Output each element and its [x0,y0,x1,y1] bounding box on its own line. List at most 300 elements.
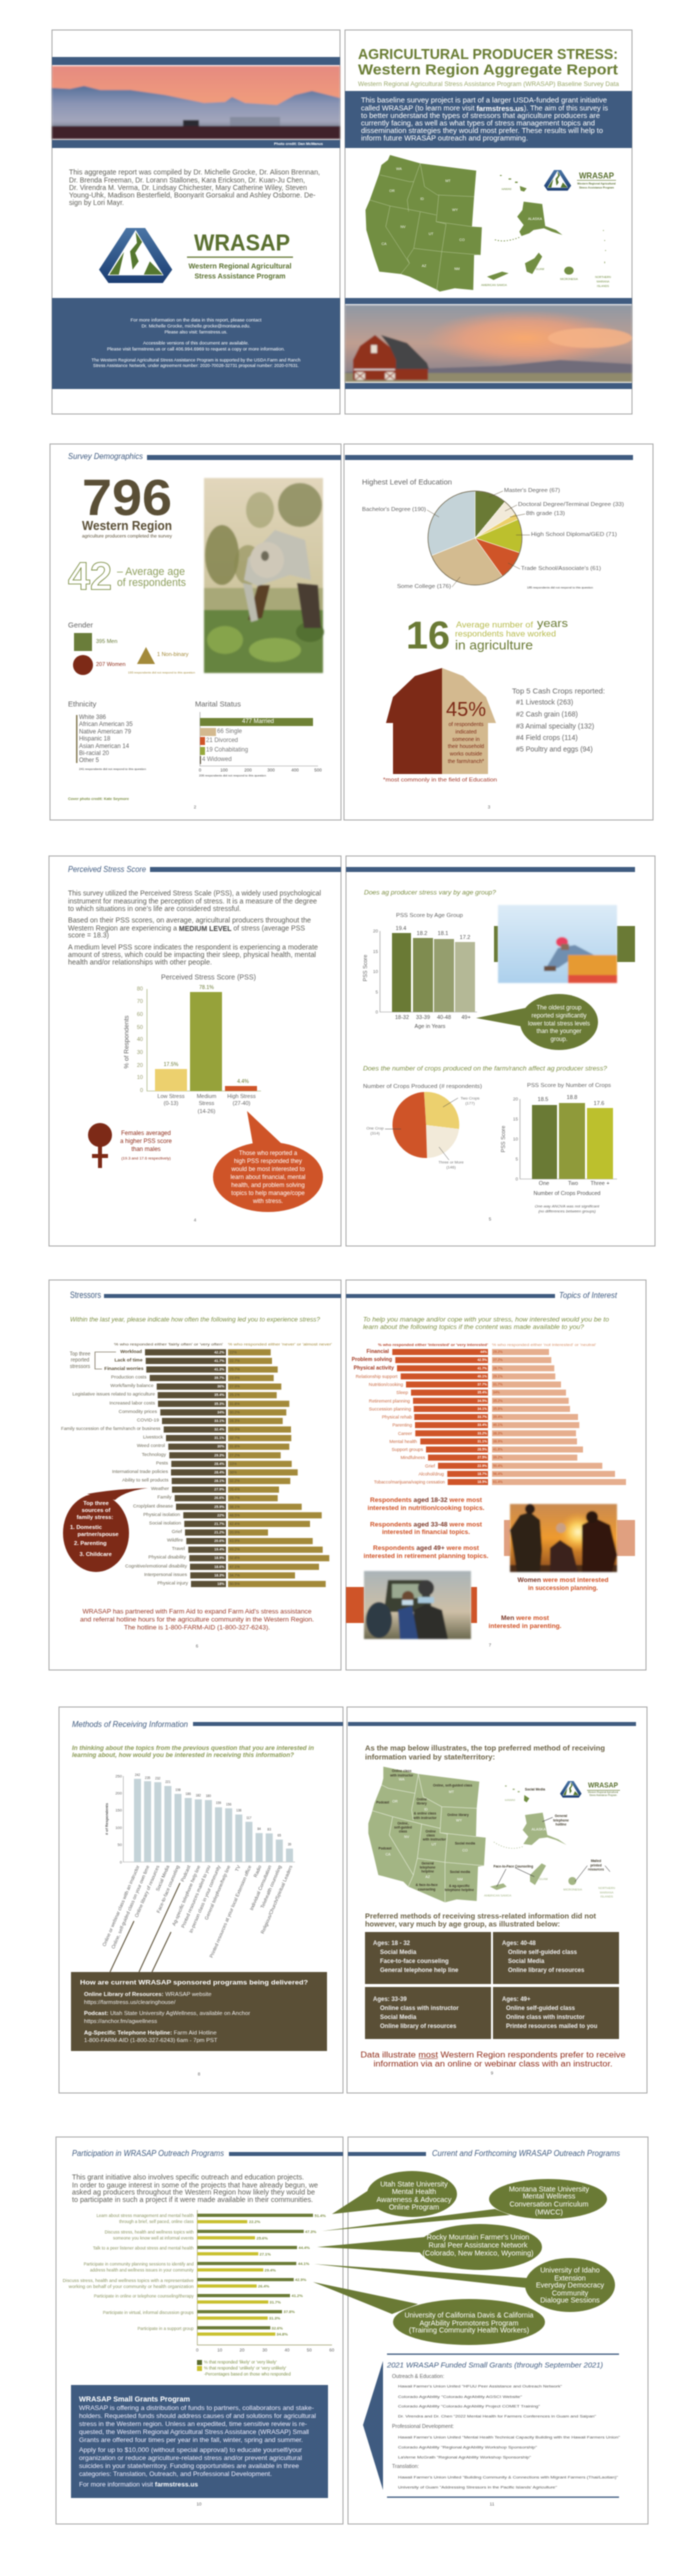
callout: Montana State University: (MWCC) [535,2208,563,2216]
diverging bar chart: stressors: 21.7% [214,1522,225,1526]
icon: female symbol with callout text [88,1123,173,1168]
panel: small grants program: categories: Translation, Outreach, and Professional Development. [79,2472,272,2478]
diverging bar chart: stressors: 43.9% [230,1539,240,1543]
map: preferred method by state: Face-to-Face Counseling [494,1864,533,1868]
bar chart: likelihood of participation: Talk to a peer listener about stress and mental health [93,2246,194,2250]
top three stressors bracket: reported [71,1358,90,1364]
map: preferred method by state: telephone [553,1818,569,1822]
diverging bar chart: stressors: Travel [172,1546,185,1552]
panel: ages 49+: Online self-guided class [506,2006,576,2012]
barn graphic: 45 percent: their household [448,744,484,750]
diverging bar chart: stressors: Wildfire [167,1538,183,1544]
diverging bar chart: stressors: 25.7% [230,1496,240,1500]
barn graphic: 45 percent [383,668,497,784]
contact footer: Accessible versions of this document are available. [143,340,249,346]
bar chart: likelihood of participation: 44.4% [298,2245,310,2250]
map: preferred method by state: Online [416,1797,427,1801]
diverging bar chart: topics: 38.9% [493,1439,503,1443]
bar chart: PSS by number of crops: Two [568,1181,578,1187]
callout: Montana State University [322,2179,607,2231]
diverging bar chart: stressors: 36% [230,1470,237,1474]
bar chart: PSS by age: 18.1 [438,931,448,937]
bar chart: preferred methods: 221 [165,1780,171,1784]
diverging bar chart: stressors: 23.9% [230,1376,240,1380]
top three stressors bracket: stressors [70,1364,91,1370]
diverging bar chart: topics: Relationship support [356,1374,398,1379]
callout: high stress respondents: Those who reported a [239,1151,298,1157]
map labels: NM [454,267,460,271]
map: preferred method by state: OR [392,1799,398,1803]
panel: ages 18-32: Ages: 18 - 32 [373,1941,411,1947]
bar chart: PSS by age: 5 [375,990,378,994]
diverging bar chart: stressors: 33.1% [214,1419,225,1423]
intro text: information varied by state/territory: [365,1754,495,1762]
page 12: current and forthcoming programs [313,2137,648,2524]
explanatory text: instrument for measuring the perception of stress. It is a measure of the degree [68,898,317,906]
page 11: participation in outreach programs [56,2137,343,2524]
callout: University of Idaho: University of Idaho [540,2266,600,2274]
panel: funded small grants: University of Guam "Addressing Stressors in the Pacific Islands' Agriculture" [398,2484,558,2490]
bar chart: PSS by age: 20 [373,928,378,934]
diverging bar chart: stressors: Crop/plant disease [133,1503,173,1509]
small WRASAP logo: Stress Assistance Program [589,1794,617,1797]
map: preferred method by state: & online class [414,1812,436,1816]
diverging bar chart: topics: Nutrition/cooking [369,1382,403,1387]
map: preferred method by state: & face-to-face [416,1883,438,1887]
contact footer: Please also visit: farmstress.us. [164,330,228,336]
bar chart: preferred methods: 198 [175,1788,181,1792]
diverging bar chart: stressors: 52.8% [230,1556,240,1560]
conclusion text: information via an online or webinar class with an instructor. [374,2060,612,2068]
bar chart: preferred methods: 232 [155,1776,161,1780]
PSS bar chart: 10 [137,1075,143,1081]
map: preferred method by state: Social Media [525,1787,545,1791]
diverging bar chart: topics: % who responded either 'not interested' or 'neutral' [492,1343,596,1347]
pie chart: number of crops: Number of Crops Produced (# respondents) [363,1084,482,1090]
PSS bar chart: 0 [140,1088,143,1094]
intro panel [345,91,632,148]
callout: Montana State University: Montana State University [509,2184,590,2194]
bar chart: preferred methods: 186 [186,1792,191,1796]
Farm Aid hotline note [80,1608,314,1632]
bar chart: likelihood of participation: Participate in online or telephone counseling/therapy [94,2294,195,2298]
diverging bar chart: topics: 29.1% [493,1374,503,1378]
diverging bar chart: stressors: 26.6% [214,1496,225,1500]
stat: 16 years in agriculture: in agriculture [455,638,533,652]
top 5 cash crops list: #4 Field crops (114) [516,735,578,742]
bar chart: PSS by age [363,913,477,1030]
diverging bar chart: topics: Retirement planning [369,1398,410,1403]
education pie chart: Master's Degree (67) [504,488,560,494]
diverging bar chart: topics: 33.2% [477,1431,487,1435]
map: preferred method by state: with instructor [422,1838,447,1842]
top 5 cash crops list: Top 5 Cash Crops reported: [512,686,605,696]
diverging bar chart: stressors: Cognitive/emotional disability [125,1563,188,1569]
bar chart: likelihood of participation: 25.6% [256,2235,268,2240]
bar chart: PSS by number of crops: (no differences between groups) [538,1208,596,1214]
panel: ages 33-39: Social Media [380,2015,417,2021]
diverging bar chart: stressors: Family succession of the farm/ranch or business [61,1426,161,1432]
ethnicity list: White 386 [79,715,107,721]
panel: current programs: Online Library of Resources: WRASAP website [84,1992,211,1998]
panel: funded small grants: 2021 WRASAP Funded Small Grants (through September 2021) [386,2360,604,2370]
bar chart: likelihood of participation: % that responded 'likely' or 'very likely' [204,2360,277,2364]
WRASAP logo: Western Regional Agricultural [188,262,292,270]
barn graphic: 45 percent: of respondents [448,722,484,728]
heading [72,1719,343,1729]
map: preferred method by state: AZ [425,1875,431,1879]
callout: Utah State University: Awareness & Advocacy [377,2195,452,2204]
gender: 1 Non-binary [157,652,189,658]
PSS bar chart: 20 [137,1063,143,1069]
diverging bar chart: stressors: Livestock [143,1435,164,1441]
bar chart: likelihood of participation: through a brief, self paced, online class [119,2219,194,2224]
bar chart: likelihood of participation: 29.4% [264,2267,276,2272]
panel: ages 49+: Online class with instructor [506,2015,585,2021]
education pie chart [362,488,624,590]
bar chart: preferred methods: Radio [253,1864,263,1879]
map labels: MT [445,179,451,183]
bar chart: preferred methods: 242 [135,1773,140,1777]
map labels: CA [382,242,387,246]
contact footer: Stress Assistance Network, under agreement number: 2020-70028-32731 proposal number: 2020-07631. [93,363,299,369]
heading [70,1290,341,1300]
bar chart: likelihood of participation: 41.2% [292,2293,303,2298]
bar chart: PSS by age: 18-32 [395,1015,409,1021]
title: Western Region Aggregate Report [358,62,618,78]
heading: Current and Forthcoming WRASAP Outreach Programs [432,2148,621,2158]
panel: ages 33-39: Online class with instructor [380,2006,459,2012]
map labels: OR [389,189,395,193]
top 5 cash crops list: #2 Cash grain (168) [516,712,578,718]
bar chart: PSS by age: 0 [375,1010,378,1014]
page number: 9 [491,2070,494,2076]
bar chart: likelihood of participation: 20 [239,2348,245,2352]
callout: Utah State University: Utah State University [380,2180,448,2188]
bar chart: likelihood of participation: 47.3% [305,2229,317,2234]
PSS bar chart: High Stress [227,1094,256,1100]
map: preferred method by state: class [399,1830,407,1834]
stat: average age [68,556,186,598]
map: western region states and territories: NORTHERN [595,275,611,279]
cover photo credit: Cover photo credit: Kate Seymore [68,797,129,801]
bar chart: PSS by number of crops: One-way ANOVA was not significant [535,1204,600,1208]
page 1: cover back [52,30,340,414]
bar chart: preferred methods: 156 [226,1802,232,1806]
callout: oldest group: than the younger [536,1029,582,1035]
top 5 cash crops list [512,686,605,754]
panel: ages 49+: Ages: 49+ [502,1997,531,2003]
panel: funded small grants: LaVerne McGrath "Regional AgrAbility Workshop Sponsorship" [398,2454,532,2460]
page 7: stressors [49,1280,341,1670]
connector lines to delivered programs [110,1883,180,1972]
ethnicity list: African American 35 [79,722,133,728]
bar chart: preferred methods: Telehealth counseling [260,1864,283,1909]
barn graphic: 45 percent: the farm/ranch* [448,759,484,765]
bar chart: likelihood of participation: 42.9% [295,2277,307,2282]
bar chart: preferred methods: 159 [216,1801,221,1805]
diverging bar chart: topics: Succession planning [369,1406,411,1411]
page number: 4 [194,1218,197,1222]
map: preferred method by state: Podcast [379,1847,392,1851]
stat: 796 producers: 796 [82,469,172,526]
diverging bar chart: topics: % who responded either 'interested' or 'very interested' [378,1343,488,1347]
diverging bar chart: stressors: 32.7% [230,1436,240,1440]
small WRASAP logo: Western Regional Agricultural [577,182,616,186]
panel: ages 49+: Printed resources mailed to you [506,2024,598,2030]
bar chart: PSS by age: 33-39 [416,1015,430,1021]
diverging bar chart: stressors: 47.1% [230,1565,240,1569]
gender finding: men: Men were most [501,1616,549,1622]
bar chart: likelihood of participation: Participate in a support group [138,2326,194,2331]
callout: family stress: 1. Domestic [70,1525,102,1531]
top 5 cash crops list: #1 Livestock (263) [516,700,573,706]
panel: funded small grants: Hawaii Farmer's Union United "Building Community & Connections with Migrant Farmers (Thai/Laotian)" [398,2474,619,2480]
age group findings: interested in retirement planning topics. [364,1554,489,1560]
diverging bar chart: topics: Alcohol/drug [418,1471,444,1476]
bar chart: likelihood of participation: 51.4% [314,2213,326,2218]
gender: Gender [68,620,94,630]
map: preferred method by state: General [555,1814,567,1818]
diverging bar chart: stressors: 18.6% [214,1565,225,1569]
callout: oldest group: group. [550,1037,568,1043]
heading: Perceived Stress Score [68,864,146,874]
diverging bar chart: topics: 39.2% [493,1456,503,1460]
contact footer: Dr. Michelle Grocke, michelle.grocke@montana.edu. [142,324,250,330]
map labels: UT [429,232,434,236]
bar chart: likelihood of participation: 50 [307,2348,312,2352]
small WRASAP logo: WRASAP [588,1782,618,1790]
icon: female symbol with callout text: (19.3 and 17.6 respectively) [121,1156,171,1160]
conclusion text [360,2050,626,2068]
bar chart: likelihood of participation: 37.8% [284,2309,295,2314]
pie chart: number of crops: One Crop [366,1126,384,1130]
diverging bar chart: stressors: 30% [217,1445,225,1449]
authors text: Young-Uhk, Madison Besterfield, Boonyarit Gorsakul and Ashley Osborne. De- [69,190,316,200]
panel: small grants program: Apply for up to $10,000 (without special approval) to educate yourself/your [79,2448,302,2454]
pie chart: number of crops: Two Crops [460,1096,480,1100]
PSS bar chart: 17.5% [164,1062,179,1068]
map: preferred method by state: MICRONESIA [563,1888,582,1892]
page 9: methods of receiving information [59,1707,343,2093]
marital status bar chart: 206 respondents did not respond to this question [199,774,267,778]
diverging bar chart: stressors: Pests [156,1460,169,1466]
diverging bar chart: topics: 41.7% [477,1366,487,1370]
callout: family stress [63,1488,148,1572]
PSS bar chart [124,974,261,1115]
map: preferred method by state: CO [462,1849,468,1853]
diverging bar chart: stressors: Weather [151,1486,169,1492]
age group findings: Respondents aged 33-48 were most [370,1522,482,1528]
panel: current programs: Ag-Specific Telephone Helpline: Farm Aid Hotline [84,2030,217,2036]
age group findings [364,1498,489,1560]
callout: University of Idaho: Community [552,2288,589,2298]
diverging bar chart: stressors: International trade policies [112,1469,169,1475]
bar chart: preferred methods: 117 [246,1816,252,1820]
marital status bar chart: 0 [199,768,202,772]
gender finding: men [488,1616,562,1630]
diverging bar chart: stressors: 42.2% [214,1350,225,1354]
callout: oldest group: reported significantly [531,1014,587,1020]
bar chart: likelihood of participation: Participate in virtual, informal discussion groups [103,2310,194,2315]
diverging bar chart: topics: 61.4% [493,1480,503,1484]
heading: Methods of Receiving Information [72,1719,188,1729]
marital status bar chart: 300 [267,768,275,772]
map: preferred method by state: GUAM [539,1877,548,1881]
bar chart: PSS by number of crops: 18.8 [567,1095,577,1101]
map: preferred method by state: Online class [392,1769,412,1773]
bar chart: PSS by number of crops: 15 [513,1116,518,1122]
question: number of crops: Does the number of crops produced on the farm/ranch affect ag producer stress? [363,1066,607,1072]
diverging bar chart: topics: 38.3% [493,1431,503,1435]
map: preferred method by state: WA [399,1777,405,1781]
map labels [382,167,543,271]
diverging bar chart: stressors: 34% [217,1410,225,1414]
map: preferred method by state: AMERICAN SAMOA [484,1893,511,1897]
bar chart: likelihood of participation: % that responded 'unlikely' or 'very unlikely' [204,2366,287,2370]
map labels: ID [420,197,424,201]
panel: current programs: How are current WRASAP sponsored programs being delivered? [80,1980,308,1986]
heading [72,2148,343,2158]
map: western region states and territories: MICRONESIA [560,277,578,281]
panel: small grants program: WRASAP is offering a distribution of funds to partners, collaborators and stake- [79,2406,314,2412]
sunset photo band [52,57,340,148]
PSS bar chart: % of Respondents [124,1015,130,1069]
diverging bar chart: stressors: 31.8% [230,1445,240,1449]
diverging bar chart: stressors: 28.3% [230,1419,240,1423]
heading: Topics of Interest [559,1290,618,1300]
bar chart: likelihood of participation: 31.3% [269,2316,281,2321]
diverging bar chart: stressors: 42.4% [230,1522,240,1526]
diverging bar chart: stressors: Ability to sell products [122,1478,169,1484]
intro text: As the map below illustrates, the top preferred method of receiving [365,1746,605,1752]
panel: small grants program [71,2385,328,2498]
map: preferred method by state: Social media [455,1841,475,1845]
bar chart: PSS by number of crops: 10 [513,1136,518,1142]
map: preferred method by state [368,1767,615,1902]
contact footer [52,298,340,389]
diverging bar chart: stressors: 48.5% [230,1513,240,1517]
map: preferred method by state: MT [449,1790,455,1794]
diverging bar chart: stressors: Interpersonal issues [144,1572,188,1578]
map: preferred method by state: Mailed [591,1859,601,1863]
bar chart: preferred methods: Ag-specific telephone help line [171,1864,202,1927]
callout: oldest group: The oldest group [536,1006,582,1012]
PSS bar chart: (14-26) [198,1109,216,1115]
callout: Utah State University: Online Program [389,2202,439,2212]
stat: average age: 42 [68,556,112,598]
map: preferred method by state: counseling [418,1887,435,1891]
small WRASAP logo: Western Regional Agricultural [588,1791,619,1794]
diverging bar chart: topics: 44% [480,1350,487,1354]
page number: 3 [488,804,491,810]
panel: current programs: https://anchor.fm/agwellness [84,2019,157,2025]
map: preferred method by state: CA [385,1853,391,1857]
bar chart: likelihood of participation: 22.2% [249,2219,261,2224]
bar chart: PSS by age: PSS Score by Age Group [396,913,463,919]
diverging bar chart: topics: 18.5% [477,1480,487,1484]
bar chart: PSS by age: 19.4 [396,926,406,932]
callout: Utah State University [332,2171,457,2217]
heading [68,864,341,874]
bar chart: PSS by age: 17.2 [460,935,470,941]
question [72,1746,314,1759]
diverging bar chart: stressors: 34.7% [230,1573,240,1577]
diverging bar chart: topics: 35.2% [493,1399,503,1403]
panel: funded small grants: Hawaii Farmer's Union United "HFUU Peer Assistance and Outreach Network" [398,2384,563,2388]
diverging bar chart: stressors: Commodity prices [119,1409,158,1415]
barn photo band [345,298,632,389]
marital status bar chart: 4 Widowed [202,757,232,763]
bar chart: likelihood of participation: 31.7% [270,2300,281,2304]
bar chart: preferred methods: Face-to-face counseling [156,1864,181,1914]
map: preferred method by state: Online library [447,1813,469,1817]
map: preferred method by state: General [421,1861,434,1865]
marital status bar chart: 477 Married [242,719,274,725]
map: preferred method by state: hotline [556,1822,567,1826]
diverging bar chart: stressors: Physical injury [157,1580,189,1586]
diverging bar chart: stressors: 28.4% [214,1470,225,1474]
education pie chart: 185 respondents did not respond to this question [527,586,594,590]
diverging bar chart: topics: Mental health [389,1439,417,1444]
page number: 5 [489,1216,492,1222]
marital status bar chart: 200 [244,768,252,772]
diverging bar chart: stressors: Social isolation [149,1520,181,1526]
diverging bar chart: topics [352,1343,626,1485]
bar chart: likelihood of participation: Participate in community planning sessions to identify and [84,2262,194,2266]
diverging bar chart: stressors: 31.1% [214,1436,225,1440]
diverging bar chart: topics: 18.7% [477,1472,487,1476]
diverging bar chart: stressors: 38.1% [230,1505,240,1509]
bar chart: preferred methods: Social Media [155,1864,171,1892]
diverging bar chart: topics: 34.5% [477,1399,487,1403]
bar chart: likelihood of participation: someone you know well at informal events [113,2236,194,2240]
bar chart: PSS by age: 40-48 [437,1015,451,1021]
panel: ages 18-32: Social Media [380,1950,417,1956]
bar chart: likelihood of participation: address health and wellness issues in your community [90,2268,195,2272]
diverging bar chart: topics: 34% [493,1391,500,1395]
panel: ages 40-48: Online library of resources [508,1968,585,1974]
diverging bar chart: topics: 28.7% [493,1366,503,1370]
diverging bar chart: stressors: 22.7% [230,1359,240,1363]
question: learn about the following topics if the content was made available to you? [363,1324,584,1331]
callout: University of Idaho: Dialogue Sessions [540,2296,600,2304]
pie chart: number of crops [363,1084,482,1170]
map: preferred method by state: Online, [397,1821,409,1825]
education heading: Highest Level of Education [362,478,452,486]
ethnicity list: Other 5 [79,758,100,764]
heading [346,1290,618,1300]
callout: University of California Davis [313,2282,545,2345]
diverging bar chart: topics: 28.5% [477,1448,487,1452]
map labels: CO [459,238,465,242]
page number: 2 [194,804,197,810]
panel: ages 18-32: General telephone help line [380,1968,459,1974]
map labels: WA [396,167,402,171]
PSS bar chart: 70 [137,999,143,1005]
panel: small grants program: suicides in your state/territory. Funding opportunities are available in three [79,2464,300,2470]
photo: farmer tending crops [204,478,324,673]
bar chart: PSS by number of crops: 20 [513,1096,518,1102]
small WRASAP logo: Stress Assistance Program [579,186,615,190]
panel: small grants program: For more information visit farmstress.us [79,2482,199,2488]
top three stressors bracket: Top three [70,1352,91,1358]
intro text: This grant initiative also involves specific outreach and education projects. [72,2174,304,2182]
diverging bar chart: topics: Career [398,1431,412,1436]
pie chart: number of crops: (146) [446,1164,456,1170]
page 5: perceived stress score [49,856,341,1246]
panel: small grants program: organization or reduce agriculture-related stress and/or prevent agricultural [79,2456,302,2462]
